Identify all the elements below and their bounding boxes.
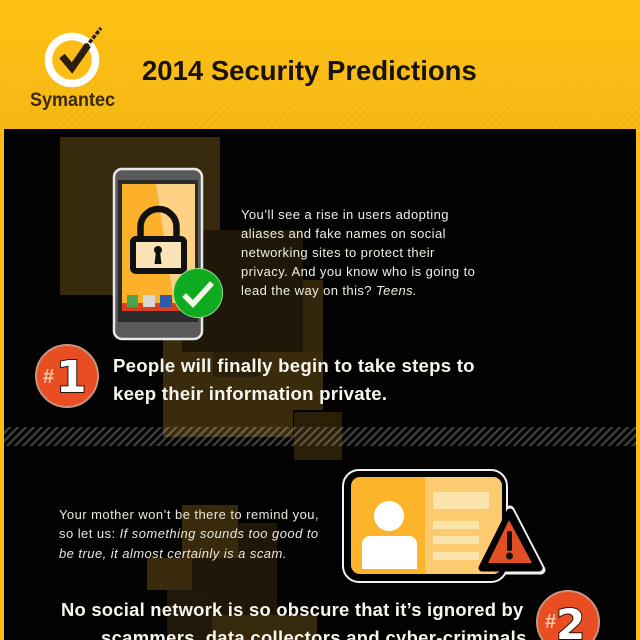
badge #1 bbox=[35, 344, 99, 408]
text: privacy description: lead the way on this? Teens. bbox=[241, 283, 417, 298]
text: scam warning bbox=[59, 507, 319, 561]
phone icon bbox=[112, 168, 223, 340]
heading: prediction 2: No social network is so obscure that it’s ignored by bbox=[61, 599, 523, 620]
text: scam warning: be true, it almost certainly is a scam. bbox=[59, 546, 287, 561]
title: 2014 Security Predictions bbox=[142, 55, 477, 86]
header band bbox=[0, 86, 640, 129]
heading: prediction 1: People will finally begin to take steps to bbox=[113, 355, 475, 376]
badge #2: # bbox=[545, 611, 556, 633]
badge #2 bbox=[536, 590, 600, 640]
text: privacy description: You’ll see a rise in users adopting bbox=[241, 207, 449, 222]
Symantec logo bbox=[30, 26, 115, 111]
text: privacy description: aliases and fake names on social bbox=[241, 226, 446, 241]
badge #1: 1 bbox=[56, 352, 87, 403]
badge #1: # bbox=[43, 366, 54, 388]
text: scam warning: so let us: If something sounds too good to bbox=[59, 526, 319, 541]
text: privacy description: privacy. And you know who is going to bbox=[241, 264, 475, 279]
text: scam warning: Your mother won’t be there to remind you, bbox=[59, 507, 319, 522]
ID card icon with warning bbox=[342, 469, 546, 583]
heading: prediction 1: keep their information private. bbox=[113, 383, 387, 404]
text: privacy description bbox=[241, 207, 475, 298]
heading: prediction 1 bbox=[113, 355, 475, 404]
background squares bbox=[60, 137, 342, 640]
Symantec logo: Symantec bbox=[30, 90, 115, 111]
text: privacy description: networking sites to protect their bbox=[241, 245, 435, 260]
hatched divider bbox=[4, 427, 636, 446]
